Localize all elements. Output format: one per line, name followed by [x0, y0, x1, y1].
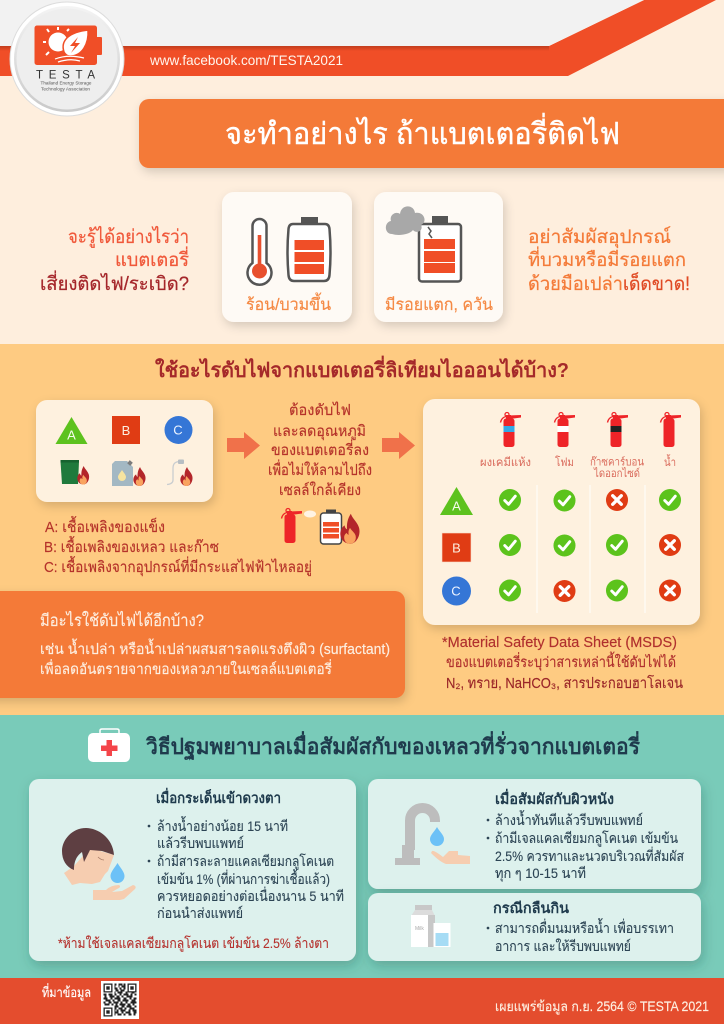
text: how to know: จะรู้ได้อย่างไรว่า	[68, 226, 189, 248]
panel: extinguisher compatibility table	[423, 399, 700, 625]
column: dry chemical	[480, 412, 531, 469]
icon: face rinsing eye	[62, 828, 136, 900]
text: fire class legend: B: เชื้อเพลิงของเหลว และก๊าซ	[44, 536, 219, 556]
row: class A: A	[452, 498, 461, 514]
icon: burning jug	[112, 460, 146, 486]
background: first aid section	[0, 715, 724, 978]
card: cracked and smoking	[374, 192, 503, 322]
card: cracked and smoking: มีรอยแตก, ควัน	[385, 296, 493, 314]
QR code	[101, 981, 139, 1019]
icon: first aid kit	[88, 729, 130, 762]
icon: class A triangle: A	[67, 428, 76, 442]
panel: other extinguishing agents: เพื่อลดอันตรายจากของเหลวภายในเซลล์แบตเตอรี่	[40, 659, 332, 678]
text: eye instructions: เข้มข้น 1% (ที่ผ่านการฆ่าเชื้อแล้ว)	[157, 869, 330, 887]
card: hot and swollen: ร้อน/บวมขึ้น	[246, 292, 331, 314]
text: must extinguish and cool: เพื่อไม่ให้ลามไปถึง	[268, 459, 372, 479]
text: MSDS note	[442, 635, 683, 692]
column: dry chemical: ผงเคมีแห้ง	[480, 456, 531, 469]
text: skin instructions: 2.5% ควรทาและนวดบริเวณที่สัมผัส	[495, 847, 684, 864]
text: do not touch	[528, 226, 690, 295]
icon: milk and water glass: Milk	[415, 926, 424, 932]
panel: other extinguishing agents: เช่น น้ำเปล่า หรือน้ำเปล่าผสมสารลดแรงตึงผิว (surfactant)	[40, 638, 390, 658]
text: do not touch: ด้วยมือเปล่า	[528, 274, 623, 295]
column: carbon dioxide	[590, 412, 644, 480]
column: foam: โฟม	[555, 455, 574, 469]
text: do not touch: ที่บวมหรือมีรอยแตก	[528, 246, 686, 271]
icon: extinguisher spraying battery	[282, 508, 360, 544]
footer: ที่มาข้อมูล	[42, 983, 91, 1001]
panel: eye contact	[29, 779, 356, 961]
arrow: to table	[382, 432, 415, 459]
text: MSDS note: *Material Safety Data Sheet (MSDS)	[442, 635, 677, 651]
text: how to know	[40, 226, 189, 295]
text: eye instructions: แล้วรีบพบแพทย์	[157, 835, 244, 851]
text: how to know: แบตเตอรี่	[115, 246, 189, 271]
panel: other extinguishing agents	[0, 591, 405, 698]
row: class C: C	[451, 584, 461, 598]
icon: class B square: B	[122, 423, 130, 438]
icon: burning plug	[167, 460, 193, 486]
panel: skin contact: เมื่อสัมผัสกับผิวหนัง	[495, 788, 614, 808]
column: foam	[554, 412, 575, 469]
row: class B	[442, 533, 681, 562]
icon: faucet and hand	[395, 808, 470, 865]
icon: class A triangle	[56, 417, 88, 444]
text: do not touch: อย่าสัมผัสอุปกรณ์	[528, 226, 671, 249]
website url: www.facebook.com/TESTA2021	[149, 52, 343, 68]
text: must extinguish and cool	[268, 401, 372, 499]
panel: ingestion	[368, 893, 701, 961]
icon: thermometer	[248, 219, 271, 285]
header banner	[0, 0, 716, 76]
footer: เผยแพร่ข้อมูล ก.ย. 2564 © TESTA 2021	[495, 999, 709, 1015]
text: skin instructions: ถ้ามีเจลแคลเซียมกลูโคเนต เข้มข้น	[495, 830, 678, 847]
panel: other extinguishing agents: มีอะไรใช้ดับไฟได้อีกบ้าง?	[40, 611, 204, 630]
text: ingestion instructions: อาการ และให้รีบพบแพทย์	[495, 938, 631, 954]
text: MSDS note: N₂, ทราย, NaHCO₃, สารประกอบฮาโลเจน	[446, 674, 683, 692]
logo: TESTA	[10, 2, 124, 116]
logo: TESTA: Technology Association	[41, 86, 90, 92]
text: eye instructions: ล้างน้ำอย่างน้อย 15 นาที	[157, 816, 288, 834]
text: eye instructions: ก่อนนำส่งแพทย์	[157, 905, 243, 921]
text: fire class legend: A: เชื้อเพลิงของแข็ง	[45, 516, 165, 536]
icon: milk and water glass	[411, 905, 450, 947]
column: water	[660, 412, 681, 469]
text: fire class legend: C: เชื้อเพลิงจากอุปกรณ์ที่มีกระแสไฟฟ้าไหลอยู่	[44, 556, 312, 577]
text: ingestion instructions	[487, 918, 674, 954]
text: ingestion instructions: สามารถดื่มนมหรือน้ำ เพื่อบรรเทา	[495, 918, 674, 936]
text: skin instructions	[487, 810, 684, 882]
text: fire class legend	[44, 516, 312, 577]
row: class B: B	[452, 540, 461, 556]
icon: class C circle	[164, 416, 192, 444]
panel: skin contact	[368, 779, 701, 889]
text: do not touch: เด็ดขาด!	[623, 271, 690, 295]
column: carbon dioxide: ก๊าซคาร์บอน	[590, 456, 644, 468]
text: skin instructions: ทุก ๆ 10-15 นาที	[495, 865, 586, 882]
text: must extinguish and cool: ต้องดับไฟ	[289, 401, 351, 419]
heading: first aid: วิธีปฐมพยาบาลเมื่อสัมผัสกับของเหลวที่รั่วจากแบตเตอรี่	[145, 730, 640, 761]
icon: swollen battery	[288, 217, 330, 281]
icon: smoke cloud	[386, 206, 425, 235]
text: how to know: เสี่ยงติดไฟ/ระเบิด?	[40, 270, 189, 295]
text: must extinguish and cool: เซลล์ใกล้เคียง	[279, 481, 361, 499]
card: hot and swollen	[222, 192, 352, 322]
logo: TESTA: TESTA	[36, 70, 95, 82]
panel: ingestion: กรณีกลืนกิน	[493, 900, 569, 917]
row: class C	[442, 576, 681, 606]
text: skin instructions: ล้างน้ำทันทีแล้วรีบพบแพทย์	[495, 810, 643, 828]
panel: eye contact: เมื่อกระเด็นเข้าดวงตา	[156, 787, 281, 807]
background: extinguishing section	[0, 344, 724, 715]
footer	[0, 978, 724, 1024]
text: must extinguish and cool: และลดอุณหภูมิ	[273, 423, 366, 441]
text: MSDS note: ของแบตเตอรี่ระบุว่าสารเหล่านี้ใช้ดับไฟได้	[446, 651, 676, 671]
logo: TESTA: Thailand Energy Storage	[40, 80, 92, 86]
column: carbon dioxide: ไดออกไซด์	[593, 467, 640, 480]
icon: class C circle: C	[173, 422, 183, 438]
heading: what to extinguish with: ใช้อะไรดับไฟจากแบตเตอรี่ลิเทียมไอออนได้บ้าง?	[155, 355, 569, 382]
row: class A	[440, 487, 681, 515]
icon: class B square	[112, 416, 140, 444]
background: warning section	[0, 0, 724, 344]
arrow: to cooling note	[227, 432, 260, 459]
text: must extinguish and cool: ของแบตเตอรี่ลง	[271, 439, 369, 459]
title bar: จะทำอย่างไร ถ้าแบตเตอรี่ติดไฟ	[225, 113, 620, 151]
text: eye instructions: ถ้ามีสารละลายแคลเซียมกลูโคเนต	[157, 853, 334, 870]
panel: fire classes	[36, 400, 213, 502]
title bar	[139, 99, 724, 168]
icon: burning bin	[60, 460, 89, 484]
icon: cracked battery	[419, 216, 461, 282]
panel: eye contact: *ห้ามใช้เจลแคลเซียมกลูโคเนต เข้มข้น 2.5% ล้างตา	[58, 935, 329, 952]
text: eye instructions: ควรหยอดอย่างต่อเนื่องนาน 5 นาที	[157, 887, 344, 904]
text: eye instructions	[148, 816, 344, 921]
column: water: น้ำ	[664, 454, 676, 469]
